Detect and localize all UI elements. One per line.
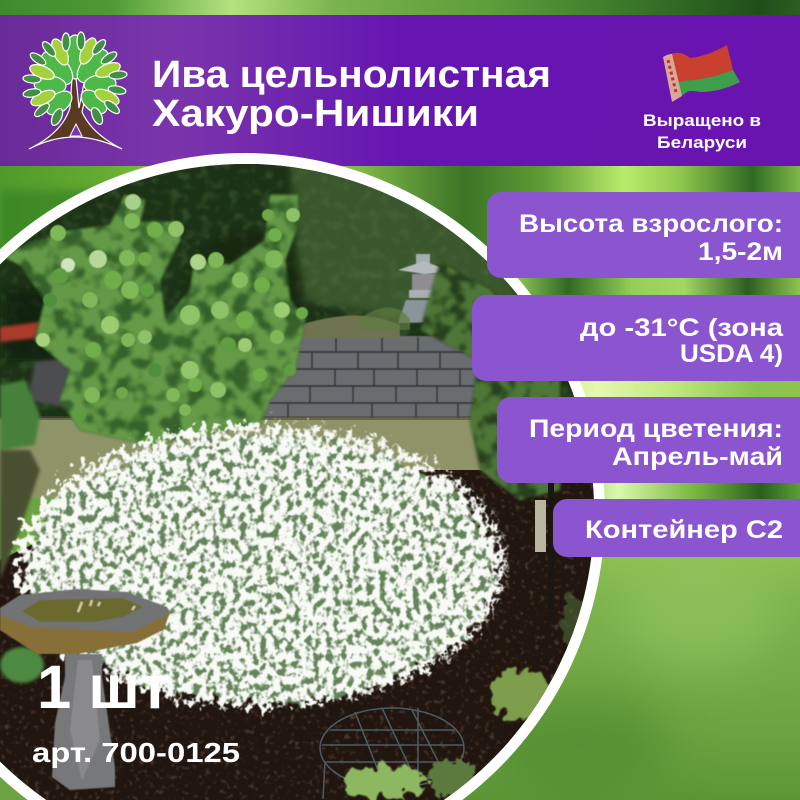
badge: container: Контейнер С2 (585, 516, 783, 544)
white variegated willow bush (17, 423, 507, 707)
badge: frost hardiness (472, 295, 800, 381)
stone lantern (398, 253, 440, 324)
badge: height: 1,5-2м (698, 238, 783, 266)
mulch ground (0, 469, 610, 800)
article number: арт. 700-0125 (32, 737, 240, 768)
title: Ива цельнолистная (152, 54, 551, 96)
redbud leaves (36, 194, 308, 422)
badge: height: Высота взрослого: (519, 210, 783, 238)
quantity: 1 шт (37, 653, 170, 721)
title (152, 54, 551, 135)
badge: flowering period (497, 397, 800, 483)
badge: height (487, 192, 800, 278)
redbud shrub (0, 194, 308, 445)
retaining wall (262, 307, 482, 421)
badge: flowering period: Апрель-май (612, 443, 783, 471)
icon: Belarus flag (663, 45, 740, 102)
lawn (0, 416, 610, 498)
badge: container (553, 499, 800, 557)
flag caption: Выращено в (643, 111, 761, 130)
badge: flowering period: Период цветения: (529, 415, 783, 443)
right tree foliage (420, 262, 560, 620)
photo: garden (0, 160, 610, 800)
title: Хакуро-Нишики (152, 93, 479, 135)
logo trunk and ground (29, 78, 122, 149)
logo leaves (22, 32, 127, 127)
badge: frost hardiness: USDA 4) (680, 340, 783, 368)
bottom-right plants (345, 596, 586, 798)
wire plant support (320, 708, 464, 799)
dark background foliage (0, 164, 574, 418)
photo ring (0, 153, 605, 800)
flag caption (643, 111, 761, 152)
flag caption: Беларуси (657, 133, 747, 152)
bird bath (0, 589, 170, 790)
logo: tree (22, 32, 127, 149)
header band (0, 15, 800, 166)
badge: frost hardiness: до -31°С (зона (580, 314, 784, 342)
left low plants (0, 380, 44, 683)
